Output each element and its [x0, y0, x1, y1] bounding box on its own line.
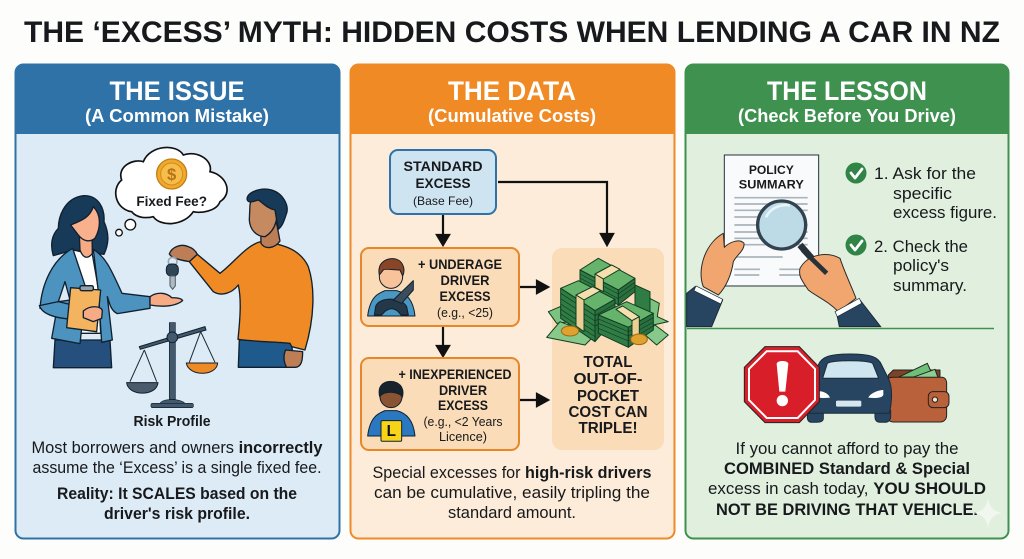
text: reality: driver's risk profile. [104, 504, 250, 523]
box: inexperienced driver excess: (e.g., <2 Years [424, 415, 502, 429]
text: warning [708, 439, 986, 519]
illustration: policy document and magnifier: SUMMARY [739, 177, 805, 191]
heading: the lesson: THE LESSON [767, 76, 927, 106]
icon: stop sign [744, 347, 819, 423]
title: THE ‘EXCESS’ MYTH: HIDDEN COSTS WHEN LENDING A CAR IN NZ [24, 16, 1000, 49]
heading: the lesson: (Check Before You Drive) [738, 106, 956, 126]
text: total out-of-pocket [568, 354, 648, 437]
box: inexperienced driver excess: + INEXPERIENCED [398, 366, 512, 382]
box: inexperienced driver excess: EXCESS [438, 397, 488, 413]
illustration: thought bubble with coin: Fixed Fee? [136, 193, 207, 209]
checklist item 2: policy's [893, 256, 949, 275]
checklist item 2 [846, 234, 968, 295]
box: standard excess: (Base Fee) [413, 194, 473, 208]
text: common assumption: Most borrowers and owners incorrectly [32, 438, 323, 457]
text: total out-of-pocket: COST CAN [568, 404, 648, 421]
box: underage driver excess: (e.g., <25) [437, 306, 493, 320]
icon: learner driver [368, 381, 415, 441]
text: total out-of-pocket: TRIPLE! [578, 420, 638, 437]
heading: the issue: (A Common Mistake) [85, 106, 269, 126]
checklist item 1: 1. Ask for the [874, 164, 976, 183]
heading: the lesson [738, 76, 956, 126]
icon: young driver [368, 259, 415, 316]
text: warning: COMBINED Standard & Special [724, 459, 970, 478]
box: underage driver excess: EXCESS [440, 288, 490, 304]
icon: learner driver: L [387, 423, 396, 440]
panel: the lesson [685, 64, 1009, 538]
heading: the data: (Cumulative Costs) [428, 106, 596, 126]
illustration: thought bubble with coin [116, 147, 227, 236]
text: total out-of-pocket: OUT-OF- [574, 371, 642, 388]
icon: money stacks [547, 258, 668, 347]
panel: the data [350, 64, 675, 538]
icon: car key [166, 257, 178, 289]
label: risk profile: Risk Profile [134, 414, 210, 430]
illustration: policy document and magnifier [687, 155, 881, 327]
icon: wallet [887, 363, 949, 422]
text: special excesses: Special excesses for high-risk drivers [372, 464, 652, 482]
heading: the data: THE DATA [448, 76, 576, 106]
checklist item 1: excess figure. [893, 203, 997, 222]
text: special excesses: can be cumulative, easily tripling the [374, 484, 650, 502]
checklist item 2: 2. Check the [874, 237, 968, 256]
text: warning: excess in cash today, YOU SHOULD [708, 479, 986, 498]
heading: the data [428, 76, 596, 126]
illustration: policy document and magnifier: POLICY [749, 163, 795, 177]
box: standard excess: EXCESS [416, 175, 470, 191]
heading: the issue: THE ISSUE [110, 76, 244, 106]
box: underage driver excess [361, 248, 519, 326]
text: reality [57, 484, 297, 523]
box: underage driver excess: DRIVER [440, 272, 490, 288]
icon: sparkle [974, 498, 1002, 528]
panel: total cost [547, 248, 668, 450]
box: standard excess: STANDARD [404, 158, 482, 174]
box: inexperienced driver excess: DRIVER [439, 382, 487, 398]
text: total out-of-pocket: POCKET [577, 388, 640, 405]
text: warning: If you cannot afford to pay the [736, 439, 958, 458]
box: inexperienced driver excess: Licence) [439, 430, 487, 444]
text: special excesses [372, 464, 652, 522]
text: warning: NOT BE DRIVING THAT VEHICLE. [716, 500, 978, 519]
panel: the issue: assume the ‘Excess’ is a single fixed fee. [32, 458, 322, 477]
box: inexperienced driver excess [361, 358, 519, 450]
illustration: man with keys [169, 189, 313, 367]
icon: car [807, 354, 892, 422]
checklist item 1 [846, 162, 997, 222]
text: reality: Reality: It SCALES based on the [57, 484, 297, 503]
text: special excesses: standard amount. [448, 504, 576, 522]
checklist item 2: summary. [893, 276, 967, 295]
illustration: thought bubble with coin: $ [167, 165, 177, 184]
checklist item 1: specific [893, 184, 953, 203]
text: total out-of-pocket: TOTAL [584, 354, 632, 371]
flowchart arrows [437, 182, 613, 406]
heading: the issue [85, 76, 269, 126]
box: underage driver excess: + UNDERAGE [418, 256, 502, 272]
illustration: woman with clipboard [39, 196, 183, 368]
box: standard excess [390, 150, 496, 214]
illustration: scales [127, 323, 218, 408]
panel: the issue [15, 64, 340, 538]
